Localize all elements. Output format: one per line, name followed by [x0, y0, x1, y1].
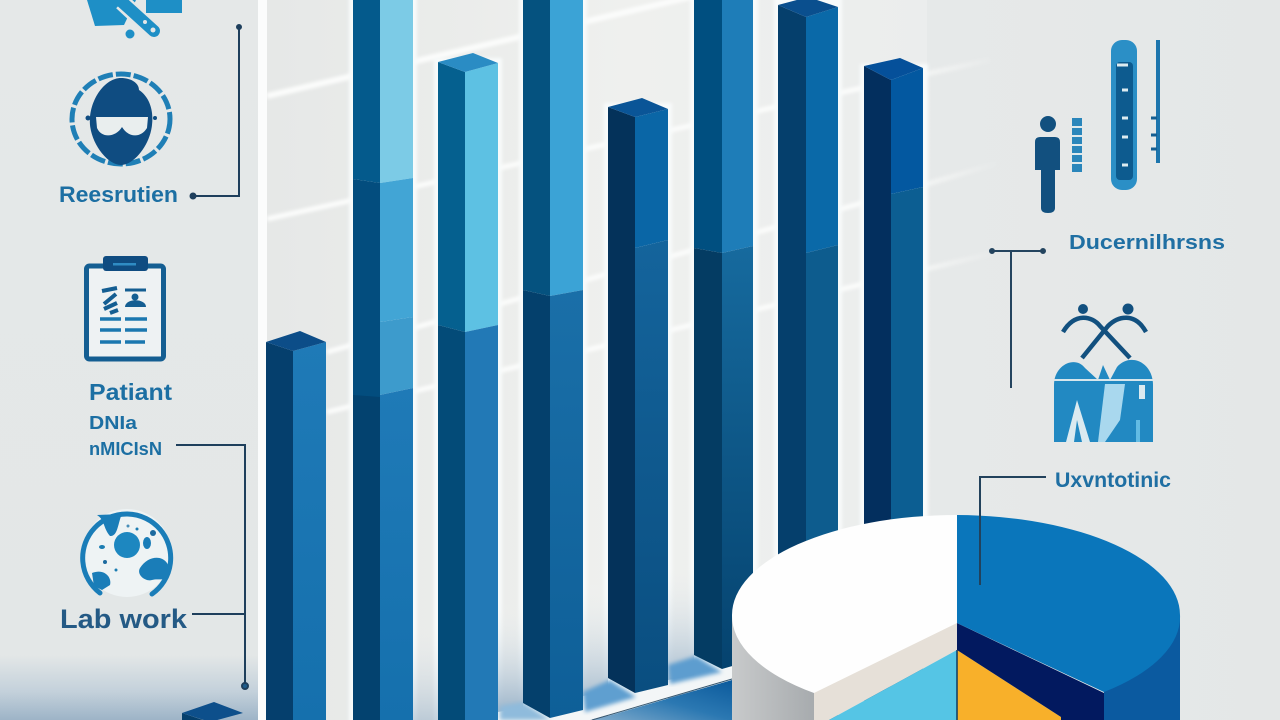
- bar halos: [349, 0, 928, 720]
- pie chart: [732, 515, 1180, 720]
- label: DNIa: DNIa: [89, 413, 138, 433]
- bar 7: [778, 0, 838, 720]
- bar 5: [608, 98, 668, 693]
- connector: top left: [190, 25, 241, 198]
- pie slice: navy: [957, 623, 1104, 720]
- floor: [498, 656, 732, 720]
- icon: two people crossing: [1063, 304, 1146, 358]
- connector: right T: [990, 249, 1045, 388]
- icon: researcher head: [72, 74, 170, 165]
- icon: building: [1054, 360, 1153, 442]
- icon: person with scale: [1035, 116, 1082, 213]
- label: nMICIN: nMICIsN: [89, 439, 162, 459]
- pie side: cream: [814, 620, 957, 720]
- connector: bottom left: [176, 445, 248, 689]
- label: Ducernilhrsns: Ducernilhrsns: [1069, 232, 1225, 254]
- pie slice: cyan: [829, 650, 957, 720]
- icon: clipboard: [86, 256, 164, 359]
- icon: lab globe: [83, 509, 171, 597]
- icon: test tube gauge: [1111, 40, 1160, 190]
- floor shadows: [413, 560, 694, 720]
- label: Reesrutien: Reesrutien: [59, 182, 178, 207]
- pie top: white slice: [732, 515, 957, 693]
- connector: to pie: [980, 477, 1046, 585]
- pie side: blue: [1104, 615, 1180, 720]
- bar 6: [694, 0, 753, 669]
- pie side: gray: [732, 615, 814, 720]
- icon: tools: [87, 0, 182, 38]
- bar 8: [864, 58, 923, 720]
- pie top: blue slice: [957, 515, 1180, 692]
- wall grid lines: [267, 0, 998, 412]
- pie slice: orange: [957, 650, 1061, 720]
- bar chart: [182, 0, 923, 720]
- bar 3: [438, 53, 498, 720]
- bar 2: [353, 0, 413, 720]
- label: Uxvntotinic: Uxvntotinic: [1055, 469, 1171, 492]
- label: Lab work: Lab work: [60, 604, 188, 634]
- bar 1: [266, 331, 326, 720]
- bar 0: short foreground bar: [182, 702, 243, 720]
- label: Patiant: Patiant: [89, 379, 172, 405]
- bar 4: [523, 0, 583, 718]
